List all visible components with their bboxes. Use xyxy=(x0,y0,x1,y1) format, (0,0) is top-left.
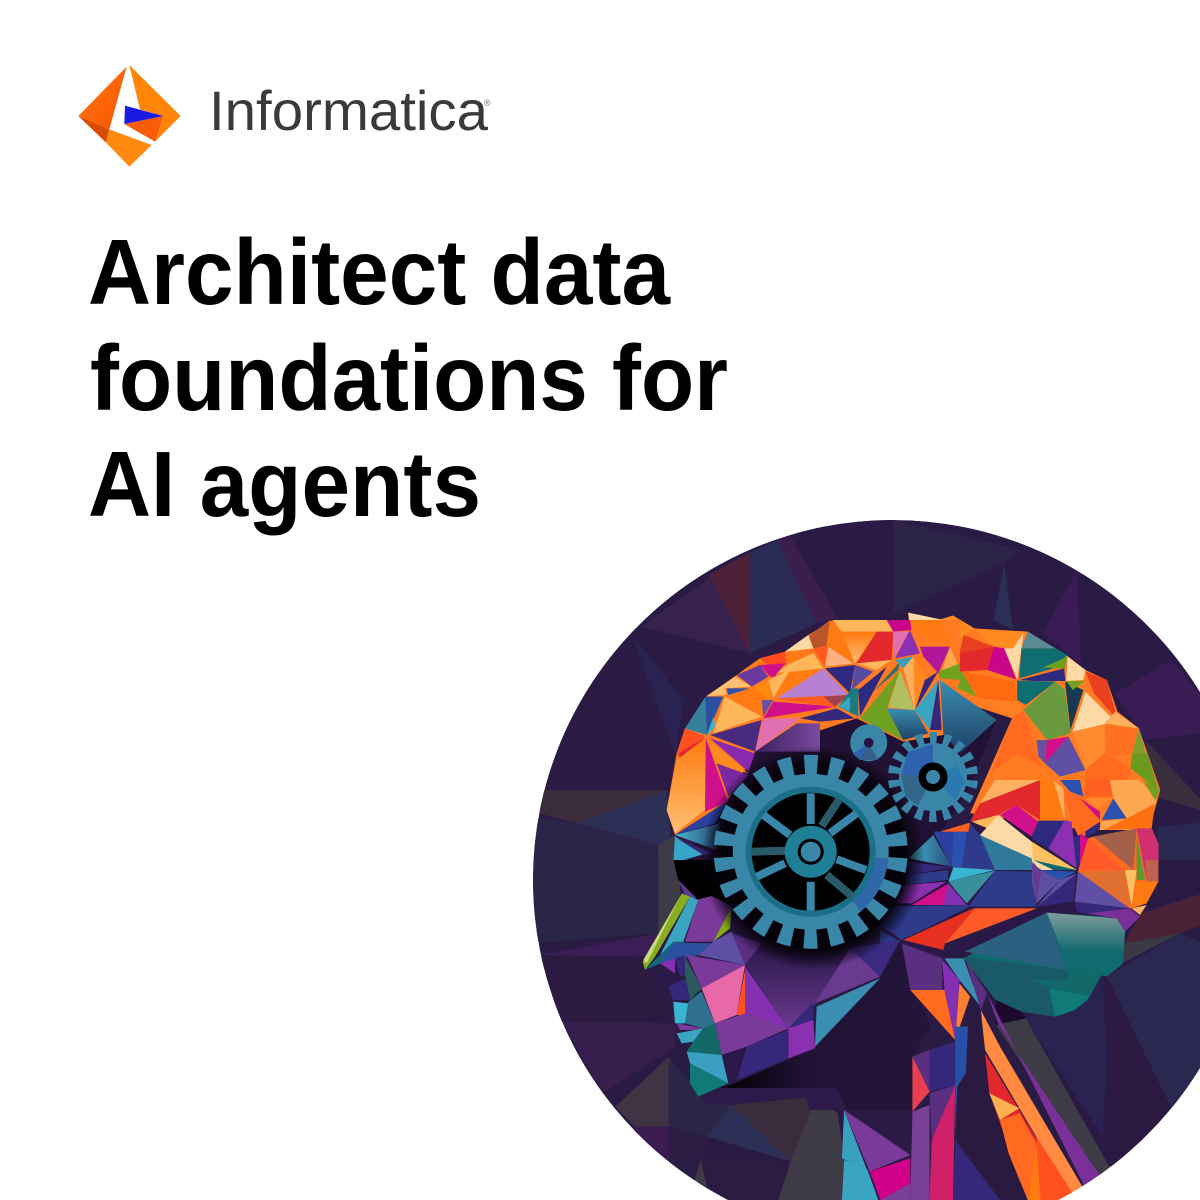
illustration: low-poly head with gears in circle xyxy=(530,520,1200,1200)
gear rim xyxy=(746,787,876,917)
title: Architect data xyxy=(88,220,671,324)
under-jaw shadow xyxy=(720,942,930,1110)
background facets upper xyxy=(530,520,1200,860)
gear hub xyxy=(785,826,837,878)
gear teeth xyxy=(724,765,898,939)
gear: big xyxy=(724,765,898,939)
gear: small disc xyxy=(850,724,887,761)
registered mark: ® xyxy=(484,98,491,108)
title xyxy=(88,220,728,536)
left brain silhouette xyxy=(667,620,960,835)
background facets lower xyxy=(530,860,1200,1200)
gear cavity xyxy=(673,718,997,920)
title: AI agents xyxy=(88,432,481,536)
face facets xyxy=(643,860,900,1110)
neck facets xyxy=(842,943,1100,1200)
big gear shadow xyxy=(701,746,925,970)
circle background xyxy=(533,520,1200,1200)
gear opening xyxy=(752,793,870,911)
lower-right rim shade xyxy=(856,858,880,905)
gear body xyxy=(733,774,889,930)
head: left brain, top facets and gear cavity xyxy=(667,620,997,920)
wordmark: Informatica xyxy=(209,79,489,142)
gear spokes xyxy=(752,793,866,911)
ear / jaw lump base xyxy=(964,913,1125,1025)
icon: orange diamond mark xyxy=(78,65,181,167)
head: right lower brain facets xyxy=(880,780,1160,980)
gear: medium xyxy=(894,738,972,816)
head: upper-right brain facets xyxy=(908,613,1160,830)
title: foundations for xyxy=(90,326,728,430)
logo: Informatica xyxy=(78,65,491,167)
